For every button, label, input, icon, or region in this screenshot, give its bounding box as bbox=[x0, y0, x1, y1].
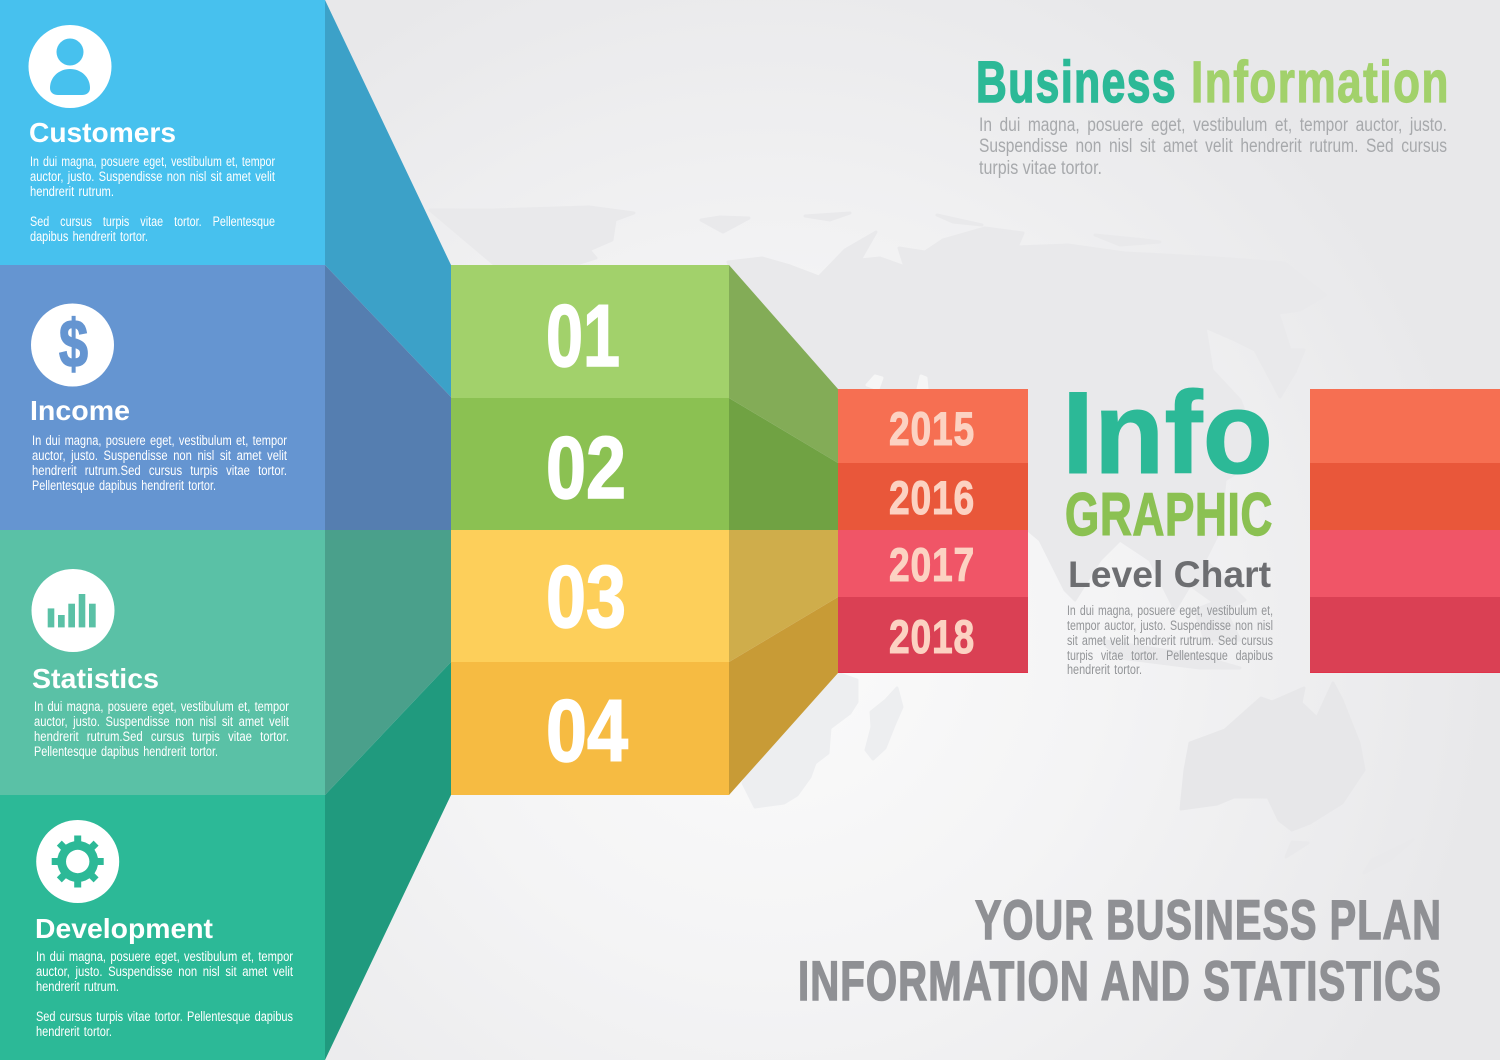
heading: business information: Business bbox=[976, 50, 1177, 115]
text: development body: In dui magna, posuere eget, vestibulum et, tempor bbox=[36, 949, 293, 964]
text: center body: hendrerit tortor. bbox=[1067, 662, 1142, 677]
level 02: 02 bbox=[546, 418, 626, 517]
text: income body: hendrerit rutrum.Sed cursus turpis vitae tortor. bbox=[32, 463, 287, 478]
year 2017: 2017 bbox=[889, 538, 975, 591]
year 2018: 2018 bbox=[889, 610, 975, 663]
icon: gear bbox=[36, 820, 119, 903]
text: business information body bbox=[979, 115, 1447, 179]
year 2017 bbox=[838, 530, 1028, 597]
text: development body: Sed cursus turpis vitae tortor. Pellentesque dapibus bbox=[36, 1009, 293, 1024]
text: income body bbox=[32, 433, 287, 493]
title: info: Info bbox=[1062, 367, 1273, 498]
text: income body: In dui magna, posuere eget, vestibulum et, tempor bbox=[32, 433, 287, 448]
year 2015 bbox=[838, 389, 1028, 463]
text: center body bbox=[1067, 603, 1273, 677]
icon: dollar bbox=[31, 304, 114, 386]
text: income body: Pellentesque dapibus hendrerit tortor. bbox=[32, 478, 216, 493]
level 01 bbox=[451, 265, 729, 398]
text: statistics body: hendrerit rutrum.Sed cursus turpis vitae tortor. bbox=[34, 729, 289, 744]
level 03 bbox=[451, 530, 729, 662]
icon: dollar: $ bbox=[59, 306, 88, 382]
heading: business information bbox=[976, 50, 1450, 115]
right color bands bbox=[1310, 389, 1500, 673]
text: development body bbox=[36, 949, 293, 1039]
text: development body: hendrerit rutrum. bbox=[36, 979, 119, 994]
text: customers body bbox=[30, 154, 275, 244]
icon: bar chart bbox=[32, 569, 114, 652]
title: level chart: Level Chart bbox=[1068, 554, 1271, 595]
text: center body: sit amet velit hendrerit rutrum. Sed cursus bbox=[1067, 633, 1273, 648]
level 04: 04 bbox=[546, 681, 628, 780]
panel: customers bbox=[0, 0, 325, 265]
title: graphic: GRAPHIC bbox=[1065, 481, 1273, 548]
level 04 bbox=[451, 662, 729, 795]
text: business information body: turpis vitae tortor. bbox=[979, 158, 1102, 179]
panel: development bbox=[0, 795, 325, 1060]
world map bbox=[430, 207, 1413, 873]
text: development body: hendrerit tortor. bbox=[36, 1024, 112, 1039]
right side faces bbox=[729, 265, 838, 795]
icon: person bbox=[28, 25, 112, 108]
text: statistics body bbox=[34, 699, 289, 759]
left side faces bbox=[325, 0, 451, 1060]
footer heading bbox=[798, 888, 1442, 1012]
text: customers body: Sed cursus turpis vitae tortor. Pellentesque bbox=[30, 214, 275, 229]
text: statistics body: In dui magna, posuere eget, vestibulum et, tempor bbox=[34, 699, 289, 714]
panel: income bbox=[0, 265, 325, 530]
heading: income: Income bbox=[30, 395, 130, 426]
text: income body: auctor, justo. Suspendisse non nisl sit amet velit bbox=[32, 448, 287, 463]
panel: statistics bbox=[0, 530, 325, 795]
heading: customers: Customers bbox=[29, 117, 176, 148]
text: development body: auctor, justo. Suspendisse non nisl sit amet velit bbox=[36, 964, 293, 979]
text: customers body: auctor, justo. Suspendisse non nisl sit amet velit bbox=[30, 169, 275, 184]
year 2018 bbox=[838, 597, 1028, 673]
text: customers body: In dui magna, posuere eget, vestibulum et, tempor bbox=[30, 154, 275, 169]
text: center body: In dui magna, posuere eget, vestibulum et, bbox=[1067, 603, 1273, 618]
heading: statistics: Statistics bbox=[32, 663, 159, 694]
text: customers body: hendrerit rutrum. bbox=[30, 184, 114, 199]
year bands bbox=[838, 389, 1028, 673]
level 02 bbox=[451, 398, 729, 530]
text: center body: turpis vitae tortor. Pellentesque dapibus bbox=[1067, 648, 1273, 663]
level 01: 01 bbox=[546, 286, 620, 385]
level 03: 03 bbox=[546, 547, 626, 646]
text: statistics body: auctor, justo. Suspendisse non nisl sit amet velit bbox=[34, 714, 289, 729]
year 2016: 2016 bbox=[889, 471, 975, 524]
heading: development: Development bbox=[35, 913, 213, 944]
center blocks: levels 01-04 bbox=[451, 265, 729, 795]
text: customers body: dapibus hendrerit tortor. bbox=[30, 229, 148, 244]
year 2015: 2015 bbox=[889, 402, 975, 455]
text: center body: tempor auctor, justo. Suspendisse non nisl bbox=[1067, 618, 1273, 633]
year 2016 bbox=[838, 463, 1028, 530]
text: statistics body: Pellentesque dapibus hendrerit tortor. bbox=[34, 744, 218, 759]
